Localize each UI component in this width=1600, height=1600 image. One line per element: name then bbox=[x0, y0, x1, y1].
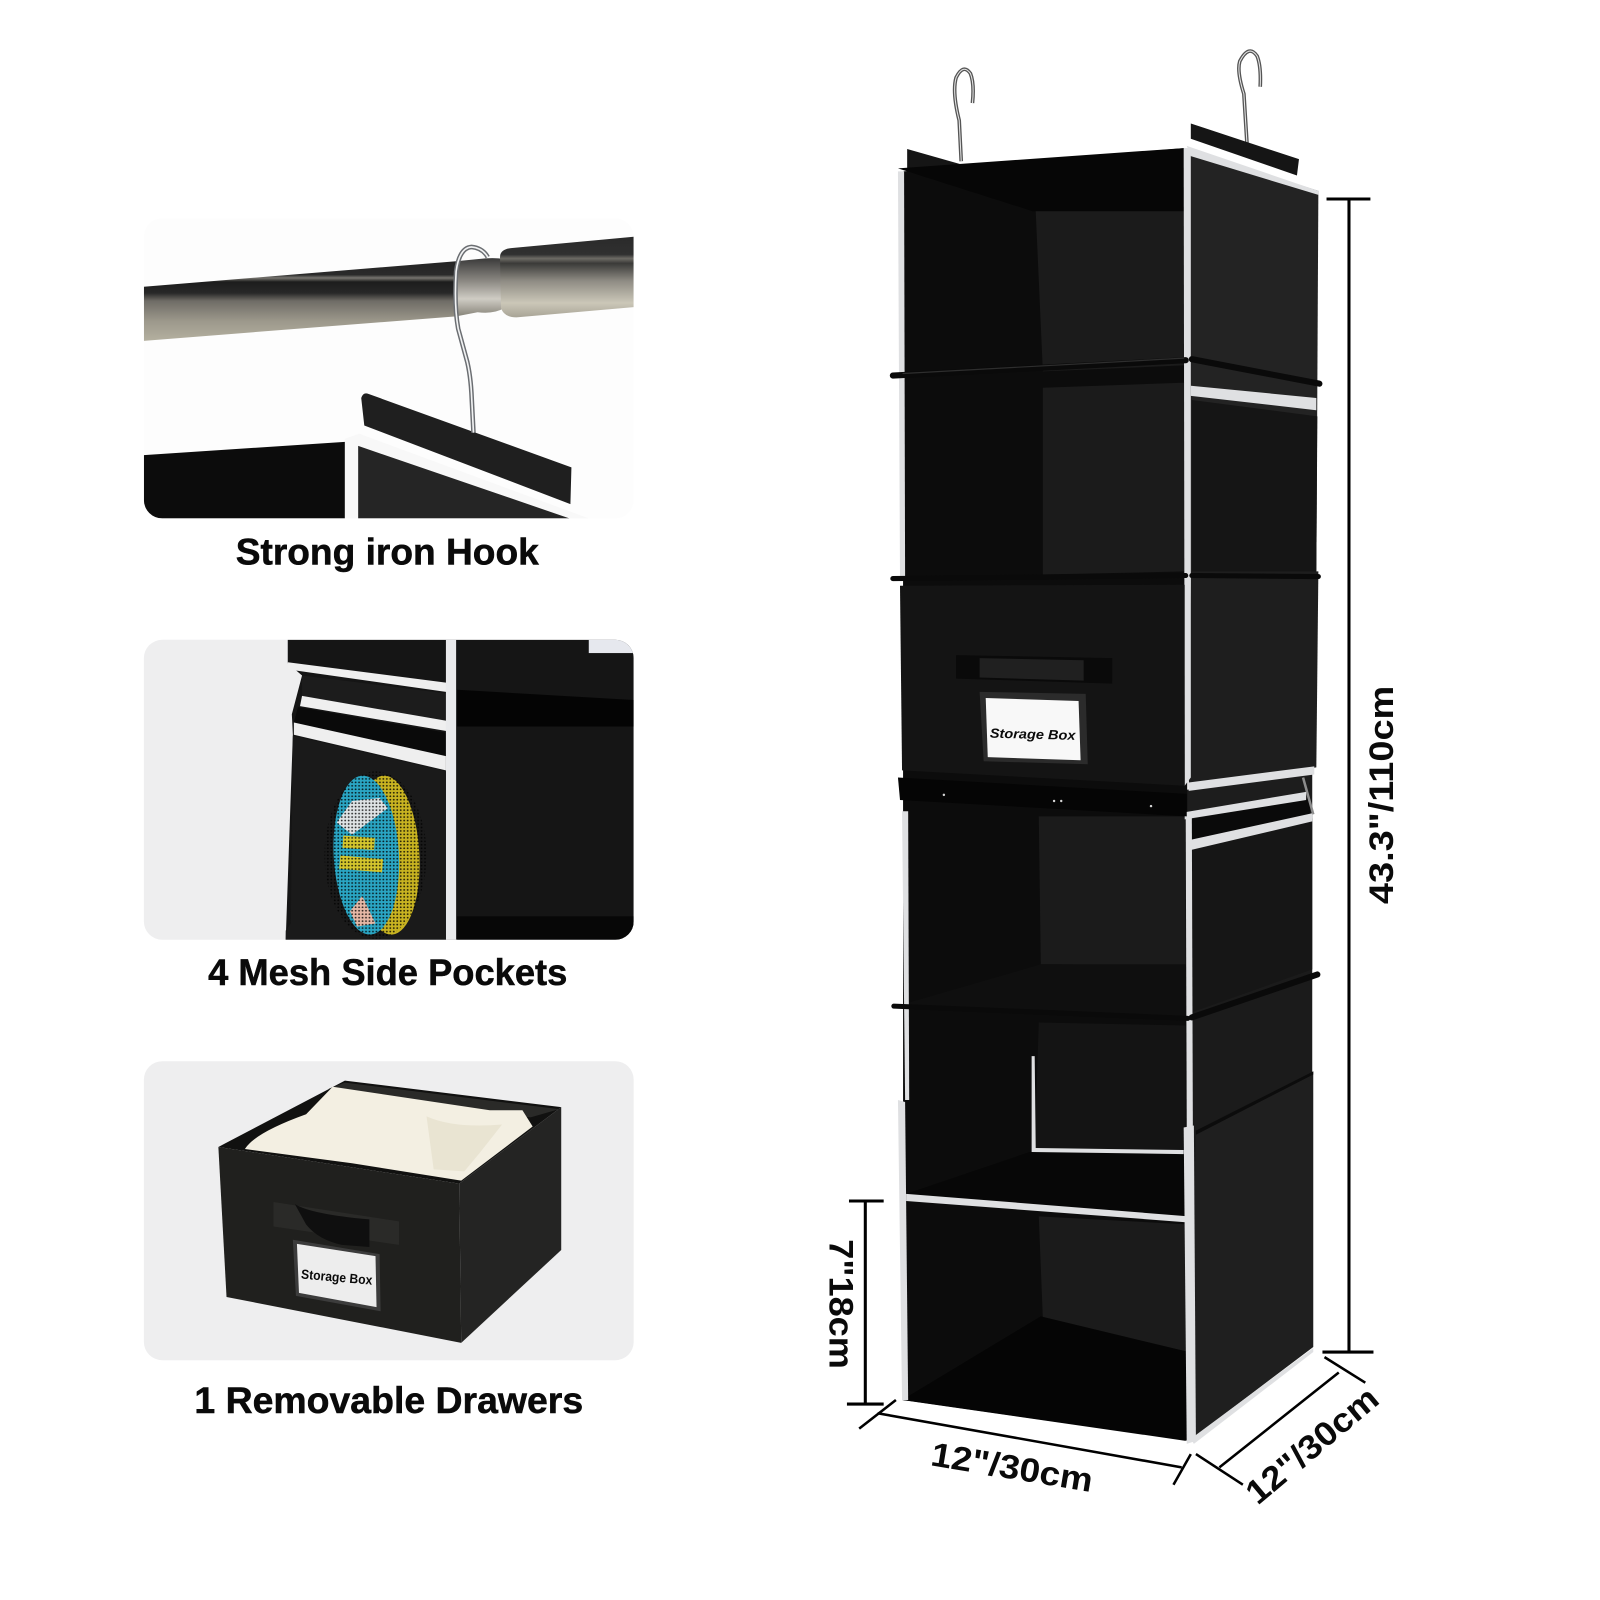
metal hook bbox=[455, 247, 488, 433]
dimension: front width bbox=[859, 1400, 1191, 1500]
shelf height label: 7"18cm bbox=[822, 1239, 860, 1369]
caption: mesh side pockets: 4 Mesh Side Pockets bbox=[208, 952, 567, 993]
mesh pocket bbox=[286, 736, 446, 940]
drawer label bbox=[293, 1240, 381, 1311]
lower shadow bbox=[457, 916, 634, 940]
white label corner bbox=[589, 640, 634, 653]
caption: strong iron hook: Strong iron Hook bbox=[236, 531, 539, 572]
dimension: side depth bbox=[1196, 1357, 1386, 1512]
side panel bbox=[358, 446, 569, 518]
front dark body bbox=[903, 148, 1189, 1441]
white binding strips bbox=[288, 640, 456, 940]
white binding strips bbox=[898, 146, 1318, 1444]
shelf floors bbox=[900, 964, 1189, 1441]
product: hanging organizer bbox=[893, 51, 1319, 1444]
pocket band bbox=[294, 707, 446, 756]
zipper band right bbox=[457, 690, 634, 727]
hanging straps bbox=[907, 123, 1299, 176]
fold seam bbox=[1196, 1071, 1313, 1135]
panel: strong iron hook bbox=[144, 218, 634, 518]
compartment backs bbox=[1035, 211, 1189, 1352]
caption: removable drawer: 1 Removable Drawers bbox=[194, 1380, 583, 1421]
panel: mesh side pockets bbox=[144, 640, 634, 940]
front face bbox=[218, 1147, 461, 1343]
dimension: shelf height bbox=[822, 1201, 884, 1404]
organizer dark block bbox=[286, 640, 634, 940]
cream clothes bbox=[245, 1087, 533, 1181]
drawer label bbox=[980, 692, 1088, 764]
drawer label: Storage Box bbox=[301, 1267, 374, 1288]
height label: 43.3"/110cm bbox=[1363, 686, 1401, 904]
hooks bbox=[955, 51, 1260, 161]
handle bbox=[273, 1202, 399, 1245]
infographic canvas bbox=[144, 49, 1394, 1504]
hanging strap bbox=[361, 393, 571, 504]
white binding bbox=[344, 442, 345, 518]
panel: removable drawer bbox=[144, 1061, 634, 1360]
zipper band left bbox=[302, 676, 450, 722]
zipper teeth dots bbox=[943, 794, 1152, 807]
front width label: 12"/30cm bbox=[928, 1436, 1096, 1500]
storage box bbox=[218, 1081, 561, 1343]
dimension: height bbox=[1322, 199, 1401, 1352]
drawer handle bbox=[956, 655, 1112, 684]
top flap bbox=[898, 148, 1186, 211]
shelf rails bbox=[893, 358, 1319, 1018]
side depth label: 12"/30cm bbox=[1239, 1380, 1386, 1512]
black front of organizer bbox=[144, 442, 345, 518]
ball behind mesh bbox=[324, 771, 427, 939]
zipper band front bbox=[898, 778, 1187, 816]
drawer installed bbox=[900, 585, 1185, 786]
drawer label: Storage Box bbox=[990, 726, 1076, 743]
zipper on side bbox=[1187, 773, 1311, 814]
curtain rod bbox=[144, 237, 634, 341]
right side panels bbox=[1184, 148, 1318, 1441]
right face bbox=[459, 1107, 561, 1343]
